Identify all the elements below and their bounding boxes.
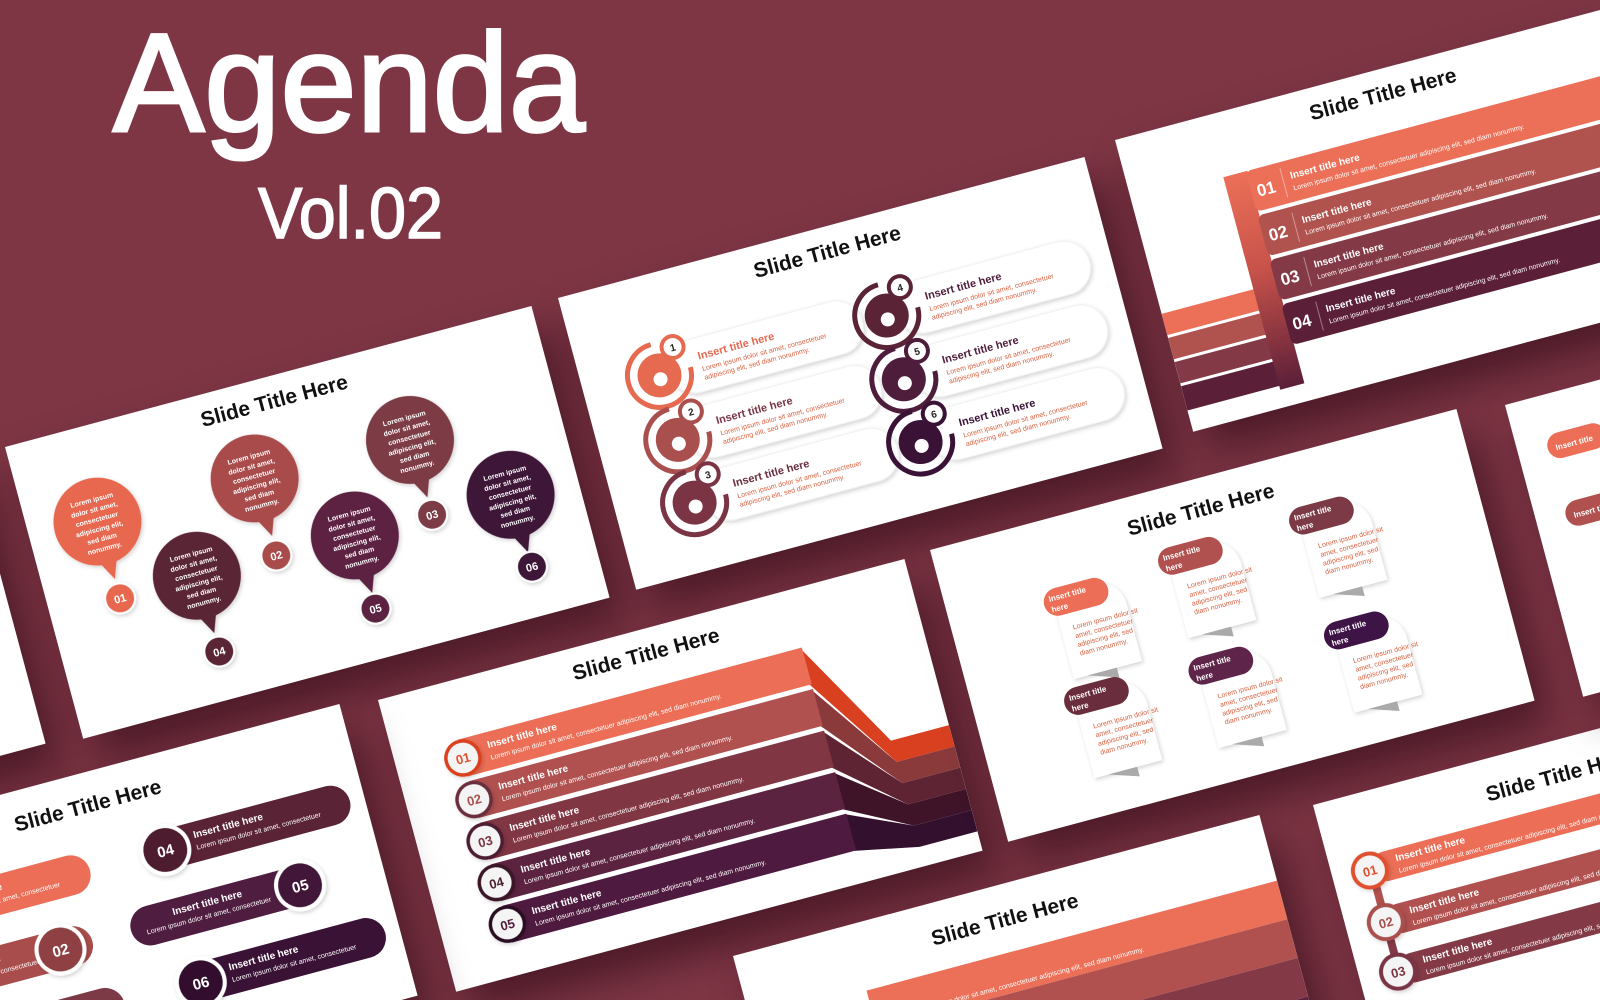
slide: speech bubbles: adipiscing elit, bbox=[388, 438, 437, 458]
slide: stairs bars: Lorem ipsum dolor sit amet, consectetuer adipiscing elit, sed diam nonummy. bbox=[501, 735, 734, 803]
slide: tag cards: Slide Title Here bbox=[1125, 479, 1277, 541]
slide: bottom-left pills: Insert title here bbox=[192, 812, 265, 841]
slide: bottom right numbered bars: Insert title here bbox=[1394, 835, 1467, 864]
slide: speech bubbles: Lorem ipsum bbox=[327, 506, 371, 524]
slide: speech bubbles: consectetuer bbox=[488, 484, 532, 502]
title: Agenda Vol.02: Agenda bbox=[113, 4, 585, 161]
slide: tag cards: Insert title bbox=[1328, 619, 1368, 637]
slide: stairs bars: Insert title here bbox=[486, 722, 559, 751]
slide: speech bubbles: dolor sit amet, bbox=[484, 474, 532, 493]
slide: numbered circles: Insert title here bbox=[924, 271, 1003, 303]
slide: bottom-left pills: Slide Title Here bbox=[12, 775, 164, 837]
slide: numbered circles: Insert title here bbox=[696, 331, 776, 363]
slide: numbered circles: Lorem ipsum dolor sit amet, consectetuer bbox=[929, 273, 1055, 313]
slide: tag cards: amet, consectetuer bbox=[1320, 537, 1380, 559]
slide: tag cards: here bbox=[1165, 560, 1184, 573]
slide: stairs bars: Lorem ipsum dolor sit amet, consectetuer adipiscing elit, sed diam nonummy. bbox=[523, 818, 756, 886]
slide: tag cards: adipiscing elit, sed bbox=[1222, 696, 1279, 718]
slide: numbered circles: adipiscing elit, sed diam nonummy. bbox=[739, 474, 846, 509]
slide: tag cards: Lorem ipsum dolor sit bbox=[1318, 526, 1384, 550]
slide: speech bubbles: nonummy. bbox=[244, 498, 280, 514]
slide: tag cards: here bbox=[1195, 670, 1214, 683]
slide: stairs bars: Insert title here bbox=[520, 846, 592, 876]
slide: numbered circles: Lorem ipsum dolor sit amet, consectetuer bbox=[963, 399, 1089, 440]
slide: bottom right numbered bars: 01 bbox=[1361, 862, 1379, 880]
slide: bottom-left pills: 06 bbox=[191, 973, 211, 994]
slide: bottom-left pills: Insert title here bbox=[228, 944, 300, 973]
slide: speech bubbles: Lorem ipsum bbox=[483, 465, 527, 483]
slide: speech bubbles: Lorem ipsum bbox=[382, 410, 427, 428]
slide: right edge partial bbox=[1505, 264, 1600, 697]
slide: numbered circles: adipiscing elit, sed diam nonummy. bbox=[704, 347, 810, 382]
slide: tag cards: diam nonummy. bbox=[1079, 638, 1129, 658]
slide: tag cards: Insert title bbox=[1048, 585, 1087, 604]
slide: tag cards: amet, consectetuer bbox=[1355, 651, 1415, 674]
slide: speech bubbles: 02 bbox=[269, 549, 284, 564]
slide: speech bubbles: 03 bbox=[425, 508, 440, 523]
slide: speech bubbles bbox=[5, 306, 610, 739]
slide: stairs bars: 01 bbox=[454, 749, 472, 768]
slide: tag cards: here bbox=[1331, 635, 1350, 648]
slide: bottom-left pills: 05 bbox=[290, 876, 311, 897]
slide: stairs bars: Lorem ipsum dolor sit amet, consectetuer adipiscing elit, sed diam nonummy. bbox=[512, 776, 745, 845]
slide: speech bubbles: consectetuer bbox=[75, 511, 119, 529]
slide: bottom right numbered bars: Insert title here bbox=[1422, 936, 1494, 966]
slide: bottom-left pills: Lorem ipsum dolor sit amet, consectetuer bbox=[196, 811, 322, 852]
slide: folded ribbon: Insert title here bbox=[1313, 241, 1385, 271]
slide: speech bubbles: adipiscing elit, bbox=[75, 520, 124, 539]
slide: speech bubbles: sed diam bbox=[399, 451, 430, 465]
slide: speech bubbles: 04 bbox=[212, 645, 228, 660]
slide: tag cards: Insert title bbox=[1068, 684, 1108, 703]
slide: tag cards: Lorem ipsum dolor sit bbox=[1186, 566, 1253, 591]
slide: tag cards: adipiscing elit, sed bbox=[1097, 726, 1154, 748]
slide: folded ribbon: Lorem ipsum dolor sit amet, consectetuer adipiscing elit, sed diam nonummy. bbox=[1305, 168, 1537, 237]
slide: speech bubbles: sed diam bbox=[344, 546, 375, 561]
slide: numbered circles: Insert title here bbox=[732, 458, 811, 490]
slide: bottom center bands bbox=[733, 815, 1338, 1000]
slide: speech bubbles: nonummy. bbox=[400, 460, 435, 475]
slide: stairs bars: 02 bbox=[465, 791, 483, 809]
slide: numbered circles: 3 bbox=[704, 470, 713, 482]
slide: bottom-left pills: Insert title here bbox=[171, 889, 244, 918]
slide: bottom-left pills: 02 bbox=[51, 941, 71, 961]
slide: speech bubbles: dolor sit amet, bbox=[228, 458, 276, 477]
slide: folded ribbon bbox=[1115, 0, 1600, 432]
slide: speech bubbles: Slide Title Here bbox=[198, 371, 350, 432]
slide: tag cards: amet, consectetuer bbox=[1219, 687, 1279, 709]
slide: tag cards: diam nonummy. bbox=[1100, 737, 1149, 757]
slide: tag cards: Insert title bbox=[1162, 544, 1202, 563]
slide: stairs bars: Insert title here bbox=[508, 805, 581, 834]
slide: tag cards: adipiscing elit, sed bbox=[1077, 627, 1134, 649]
slide: speech bubbles: dolor sit amet, bbox=[70, 501, 119, 520]
slide: numbered circles: adipiscing elit, sed diam nonummy. bbox=[722, 411, 829, 446]
slide: tag cards: Lorem ipsum dolor sit bbox=[1352, 641, 1419, 665]
slide: numbered circles: Lorem ipsum dolor sit amet, consectetuer bbox=[720, 397, 846, 437]
slide: numbered circles: Lorem ipsum dolor sit amet, consectetuer bbox=[737, 460, 863, 500]
slide: numbered circles: Slide Title Here bbox=[751, 222, 903, 283]
slide: folded ribbon: 01 bbox=[1255, 177, 1278, 201]
title: Agenda Vol.02 bbox=[111, 4, 586, 254]
slide: stairs bars: Lorem ipsum dolor sit amet, consectetuer adipiscing elit, sed diam nonummy. bbox=[535, 859, 767, 928]
slide: numbered circles: Lorem ipsum dolor sit amet, consectetuer bbox=[702, 333, 828, 373]
slide: tag cards: here bbox=[1071, 700, 1090, 714]
slide: numbered circles: 5 bbox=[913, 346, 922, 358]
slide: folded ribbon: 02 bbox=[1267, 222, 1290, 245]
slide: speech bubbles: adipiscing elit, bbox=[488, 493, 537, 513]
slide: tag cards: Lorem ipsum dolor sit bbox=[1217, 676, 1283, 700]
slide: speech bubbles: Lorem ipsum bbox=[169, 546, 213, 564]
slide: tag cards: diam nonummy. bbox=[1193, 597, 1243, 617]
slide: numbered circles: 1 bbox=[669, 342, 678, 354]
slide: speech bubbles: sed diam bbox=[186, 586, 217, 601]
title: Agenda Vol.02: Vol.02 bbox=[258, 174, 443, 254]
slide: stairs bars: Insert title here bbox=[497, 763, 570, 793]
slide: speech bubbles: Lorem ipsum bbox=[227, 449, 271, 467]
slide: numbered circles: adipiscing elit, sed diam nonummy. bbox=[965, 413, 1072, 448]
slide: tag cards: Lorem ipsum dolor sit bbox=[1072, 607, 1139, 632]
slide: numbered circles: 6 bbox=[930, 409, 939, 421]
slide: speech bubbles: sed diam bbox=[87, 532, 118, 547]
slide: speech bubbles: consectetuer bbox=[388, 429, 432, 448]
slide: right edge partial: Insert title bbox=[1555, 433, 1594, 452]
slide: tag cards: here bbox=[1296, 520, 1315, 533]
slide: speech bubbles: 05 bbox=[368, 602, 383, 617]
slide: bottom center bands: Slide Title Here bbox=[929, 889, 1081, 951]
slide: stairs bars: 04 bbox=[487, 874, 506, 892]
slide: stairs bars: Lorem ipsum dolor sit amet, consectetuer adipiscing elit, sed diam nonummy. bbox=[490, 693, 723, 762]
slide: bottom right numbered bars bbox=[1313, 664, 1600, 1000]
slide: speech bubbles: nonummy. bbox=[344, 555, 380, 571]
slide: folded ribbon: 03 bbox=[1279, 266, 1302, 290]
slide: speech bubbles: 06 bbox=[525, 560, 540, 575]
slide: numbered circles: 4 bbox=[896, 282, 905, 295]
slide: tag cards: diam nonummy. bbox=[1359, 672, 1409, 691]
slide: tag cards: diam nonummy. bbox=[1224, 707, 1273, 726]
slide: tag cards: here bbox=[1051, 601, 1070, 614]
slide: numbered circles: 2 bbox=[687, 407, 696, 419]
slide: bottom right numbered bars: 03 bbox=[1389, 963, 1407, 981]
slide: stairs bars: Insert title here bbox=[531, 888, 603, 917]
slide: folded ribbon: Insert title here bbox=[1289, 152, 1361, 182]
slide: speech bubbles: adipiscing elit, bbox=[175, 574, 223, 594]
slide: tag cards: Insert title bbox=[1192, 654, 1232, 673]
slide: speech bubbles: nonummy. bbox=[186, 595, 222, 611]
slide: tag cards: Lorem ipsum dolor sit bbox=[1093, 707, 1159, 731]
slide: speech bubbles: dolor sit amet, bbox=[170, 555, 218, 574]
slide: stairs bars: 05 bbox=[499, 916, 516, 934]
slide: stairs bars: 03 bbox=[476, 832, 494, 851]
slide: speech bubbles: sed diam bbox=[500, 505, 531, 520]
slide: numbered circles bbox=[558, 157, 1163, 590]
slide: speech bubbles: Lorem ipsum bbox=[70, 492, 114, 510]
slide: numbered circles: Insert title here bbox=[941, 334, 1020, 366]
slide: speech bubbles: consectetuer bbox=[332, 525, 377, 543]
slide: numbered circles: Insert title here bbox=[958, 397, 1037, 429]
slide: left partial blank bbox=[0, 452, 46, 885]
slide: speech bubbles: 01 bbox=[113, 592, 128, 607]
slide: bottom-left pills: Lorem ipsum dolor sit amet, consectetuer bbox=[231, 944, 358, 984]
slide: speech bubbles: sed diam bbox=[244, 489, 275, 504]
slide: folded ribbon: Lorem ipsum dolor sit amet, consectetuer adipiscing elit, sed diam nonummy. bbox=[1293, 124, 1525, 192]
slide: tag cards: Insert title bbox=[1293, 504, 1333, 523]
slide: speech bubbles: dolor sit amet, bbox=[328, 515, 376, 534]
slide: tag cards: adipiscing elit, sed bbox=[1357, 661, 1414, 683]
slide: bottom-left pills: Lorem ipsum dolor sit amet, consectetuer bbox=[146, 896, 273, 936]
slide: numbered circles: Lorem ipsum dolor sit amet, consectetuer bbox=[946, 337, 1072, 377]
slide: folded ribbon: Lorem ipsum dolor sit amet, consectetuer adipiscing elit, sed diam nonummy. bbox=[1329, 257, 1561, 326]
slide: speech bubbles: consectetuer bbox=[175, 565, 219, 583]
slide: bottom-left pills: 04 bbox=[155, 841, 177, 862]
slide: bottom-left pills bbox=[0, 704, 418, 1000]
slide: bottom right numbered bars: 02 bbox=[1377, 914, 1395, 932]
slide: tag cards: diam nonummy. bbox=[1325, 557, 1374, 576]
slide: tag cards: adipiscing elit, sed bbox=[1322, 546, 1379, 568]
slide: speech bubbles: nonummy. bbox=[87, 541, 123, 557]
slide: folded ribbon: 04 bbox=[1290, 311, 1314, 334]
slide: folded ribbon: Insert title here bbox=[1301, 197, 1373, 226]
slide: tag cards: adipiscing elit, sed bbox=[1191, 586, 1248, 608]
slide: numbered circles: adipiscing elit, sed diam nonummy. bbox=[948, 351, 1055, 386]
slide: speech bubbles: adipiscing elit, bbox=[333, 534, 381, 553]
slide: speech bubbles: dolor sit amet, bbox=[383, 419, 431, 438]
slide: numbered circles: Insert title here bbox=[715, 395, 794, 427]
slide: numbered circles: adipiscing elit, sed diam nonummy. bbox=[931, 287, 1038, 322]
slide: speech bubbles: nonummy. bbox=[500, 514, 536, 530]
slide: speech bubbles: adipiscing elit, bbox=[232, 477, 281, 496]
slide: bottom right numbered bars: Insert title here bbox=[1408, 887, 1481, 916]
slide: tag cards bbox=[930, 409, 1535, 842]
slide: folded ribbon: Slide Title Here bbox=[1307, 64, 1459, 125]
slide: folded ribbon: Insert title here bbox=[1325, 286, 1397, 315]
slide: tag cards: amet, consectetuer bbox=[1189, 577, 1249, 599]
slide: tag cards: amet, consectetuer bbox=[1075, 618, 1134, 640]
slide: folded ribbon: Lorem ipsum dolor sit amet, consectetuer adipiscing elit, sed diam nonummy. bbox=[1317, 213, 1549, 281]
slide: tag cards: amet, consectetuer bbox=[1095, 717, 1155, 739]
slide: speech bubbles: consectetuer bbox=[232, 468, 276, 486]
slide: stairs bars bbox=[378, 559, 983, 992]
slide: stairs bars: Slide Title Here bbox=[570, 624, 722, 685]
